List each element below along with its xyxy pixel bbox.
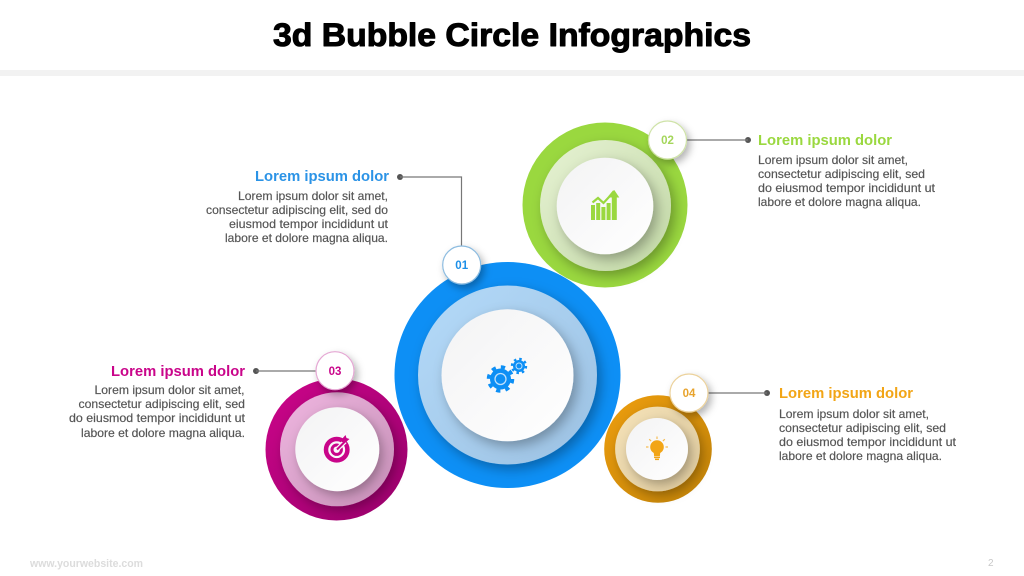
text block 04: do eiusmod tempor incididunt ut bbox=[779, 435, 957, 449]
text block 02: Lorem ipsum dolor sit amet, bbox=[758, 153, 908, 167]
icon: target bbox=[326, 435, 350, 460]
text block 01: consectetur adipiscing elit, sed do bbox=[206, 203, 388, 217]
badge 01 bbox=[443, 246, 481, 284]
text block 03: labore et dolore magna aliqua. bbox=[81, 426, 245, 440]
connector 03 bbox=[253, 368, 318, 374]
text block 01 bbox=[206, 168, 389, 245]
text block 04: Lorem ipsum dolor sit amet, bbox=[779, 407, 929, 421]
text block 03: do eiusmod tempor incididunt ut bbox=[69, 411, 246, 425]
bubble 03: magenta bbox=[266, 378, 408, 520]
text block 03: consectetur adipiscing elit, sed bbox=[78, 397, 245, 411]
text block 04: Lorem ipsum dolor bbox=[779, 385, 913, 402]
text block 02: do eiusmod tempor incididunt ut bbox=[758, 181, 936, 195]
text block 02: consectetur adipiscing elit, sed bbox=[758, 167, 925, 181]
icon: gears bbox=[488, 359, 526, 391]
connector 02 bbox=[684, 137, 751, 143]
text block 01: Lorem ipsum dolor bbox=[255, 168, 389, 185]
badge 01: 01 bbox=[455, 260, 469, 272]
icon: bar chart bbox=[591, 190, 619, 220]
header band bbox=[0, 70, 1024, 76]
badge 03: 03 bbox=[329, 366, 341, 378]
text block 04 bbox=[779, 385, 957, 463]
badge 02: 02 bbox=[661, 135, 674, 147]
connector 01 bbox=[397, 174, 462, 247]
text block 03 bbox=[69, 363, 246, 440]
badge 04 bbox=[670, 374, 708, 412]
title: 3d Bubble Circle Infographics bbox=[273, 17, 751, 53]
text block 02: labore et dolore magna aliqua. bbox=[758, 195, 921, 209]
footer website: www.yourwebsite.com bbox=[29, 558, 143, 570]
text block 01: Lorem ipsum dolor sit amet, bbox=[238, 189, 388, 203]
text block 03: Lorem ipsum dolor bbox=[111, 363, 245, 380]
icon: light bulb bbox=[646, 436, 668, 460]
badge 03 bbox=[316, 352, 354, 390]
bubble 04: orange bbox=[604, 395, 712, 503]
text block 04: consectetur adipiscing elit, sed bbox=[779, 421, 946, 435]
text block 02 bbox=[758, 132, 936, 209]
badge 04: 04 bbox=[683, 388, 696, 400]
page number: 2 bbox=[988, 558, 994, 569]
text block 01: labore et dolore magna aliqua. bbox=[225, 231, 388, 245]
text block 04: labore et dolore magna aliqua. bbox=[779, 449, 942, 463]
badge 02 bbox=[648, 121, 686, 159]
text block 01: eiusmod tempor incididunt ut bbox=[229, 217, 389, 231]
bubble 01: blue bbox=[394, 262, 620, 488]
text block 02: Lorem ipsum dolor bbox=[758, 132, 892, 149]
connector 04 bbox=[706, 390, 770, 396]
text block 03: Lorem ipsum dolor sit amet, bbox=[94, 383, 244, 397]
bubble 02: green bbox=[522, 122, 688, 288]
